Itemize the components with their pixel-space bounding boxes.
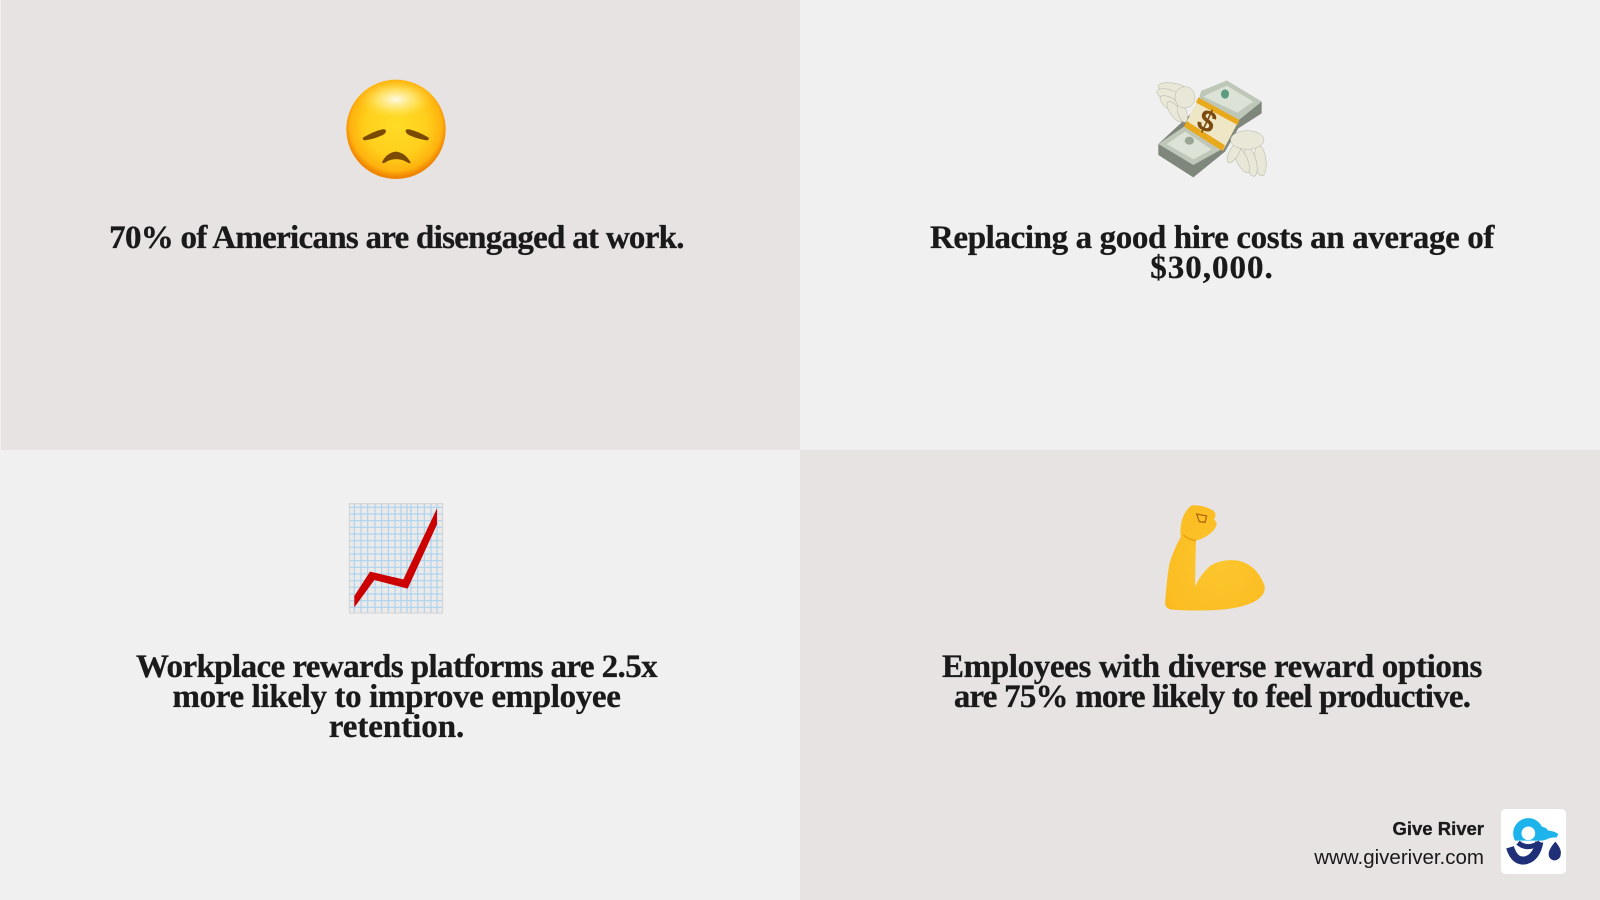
text: rewards platforms stat [136,649,658,745]
icon: rising chart [348,503,444,614]
text: disengaged stat: 70% of Americans are disengaged at work. [109,220,684,256]
text: website: www.giveriver.com [1314,846,1484,869]
text: rewards platforms stat: Workplace rewards platforms are 2.5x [136,649,657,685]
text: brand name: Give River [1392,818,1484,839]
text: rewards platforms stat: more likely to improve employee [172,679,620,715]
panel: reward options [800,450,1600,900]
panel: rewards platforms [0,450,800,900]
text: reward options stat: are 75% more likely to feel productive. [954,679,1470,715]
text: reward options stat: Employees with diverse reward options [942,649,1482,685]
panel: disengaged [1,0,800,450]
icon: flexed biceps [1165,505,1265,610]
panel: replacement cost [800,0,1600,450]
text: reward options stat [942,649,1482,715]
icon: money with wings [1156,80,1266,178]
text: replacement cost stat: $30,000. [1150,250,1274,286]
icon: Give River logo [1501,809,1566,874]
icon: disappointed face [346,80,446,179]
icon: money with wings: $ [1192,102,1222,140]
text: replacement cost stat: Replacing a good hire costs an average of [930,220,1494,256]
text: replacement cost stat [930,220,1495,286]
text: rewards platforms stat: retention. [329,709,464,745]
